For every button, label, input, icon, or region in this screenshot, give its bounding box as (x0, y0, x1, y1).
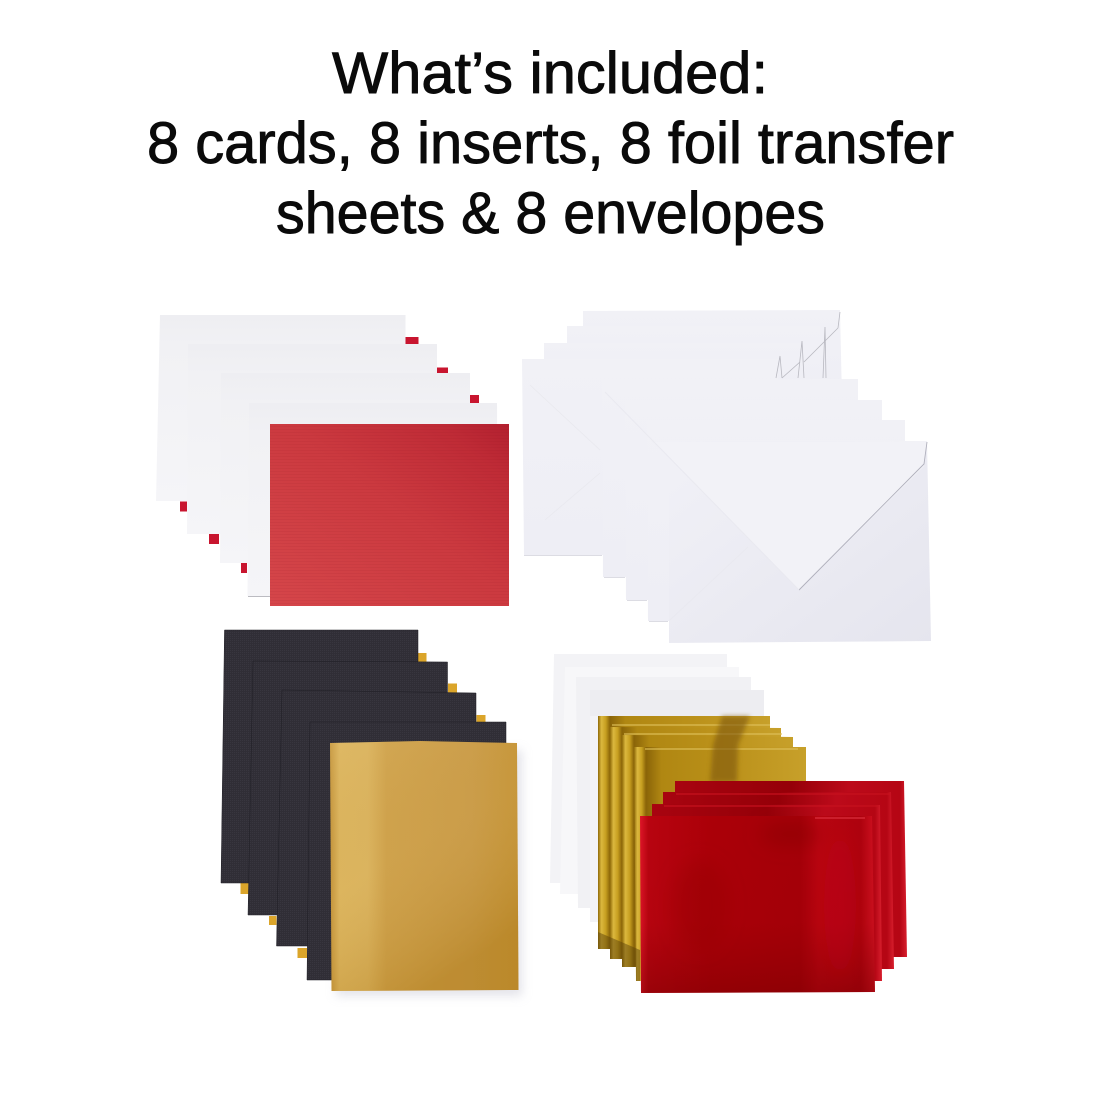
red foil sheets (640, 781, 907, 993)
back envelope flap creases (530, 312, 840, 520)
panel: foil transfer sheets (550, 654, 907, 993)
panel: white cards with red inserts (156, 315, 509, 606)
red insert tabs (180, 337, 479, 573)
gold foil fold (710, 716, 750, 782)
panel: black cards with gold inserts (221, 630, 522, 996)
front envelope flap (655, 441, 927, 590)
title line 3: sheets & 8 envelopes (276, 181, 825, 246)
stacked white cards (156, 315, 498, 596)
gold card (330, 741, 518, 991)
gold foil sheets (598, 716, 806, 981)
gold insert tabs (240, 653, 486, 958)
title line 2: 8 cards, 8 inserts, 8 foil transfer (147, 111, 954, 176)
red card (270, 424, 509, 606)
back envelope stack (522, 310, 842, 555)
soft shadow (336, 750, 522, 996)
gold foil top bands (612, 725, 798, 749)
red foil top highlight (815, 817, 865, 819)
panel: white envelopes (522, 310, 931, 643)
title line 1: What’s included: (332, 41, 768, 106)
front envelope body (669, 441, 931, 643)
title (147, 41, 954, 246)
front red foil sheet (640, 816, 875, 993)
left crease lines (605, 392, 799, 620)
white sheet top shading (590, 690, 764, 716)
front envelope flap edge (799, 442, 927, 590)
red foil shading (672, 822, 856, 975)
envelope bottom shadows (524, 556, 668, 622)
red foil band highlights (664, 794, 890, 806)
gold foil dark corners (598, 932, 640, 981)
middle envelopes (602, 379, 905, 621)
card shadow edges (248, 596, 270, 598)
stacked black cards (221, 630, 506, 980)
white foil backing sheets (550, 654, 764, 922)
